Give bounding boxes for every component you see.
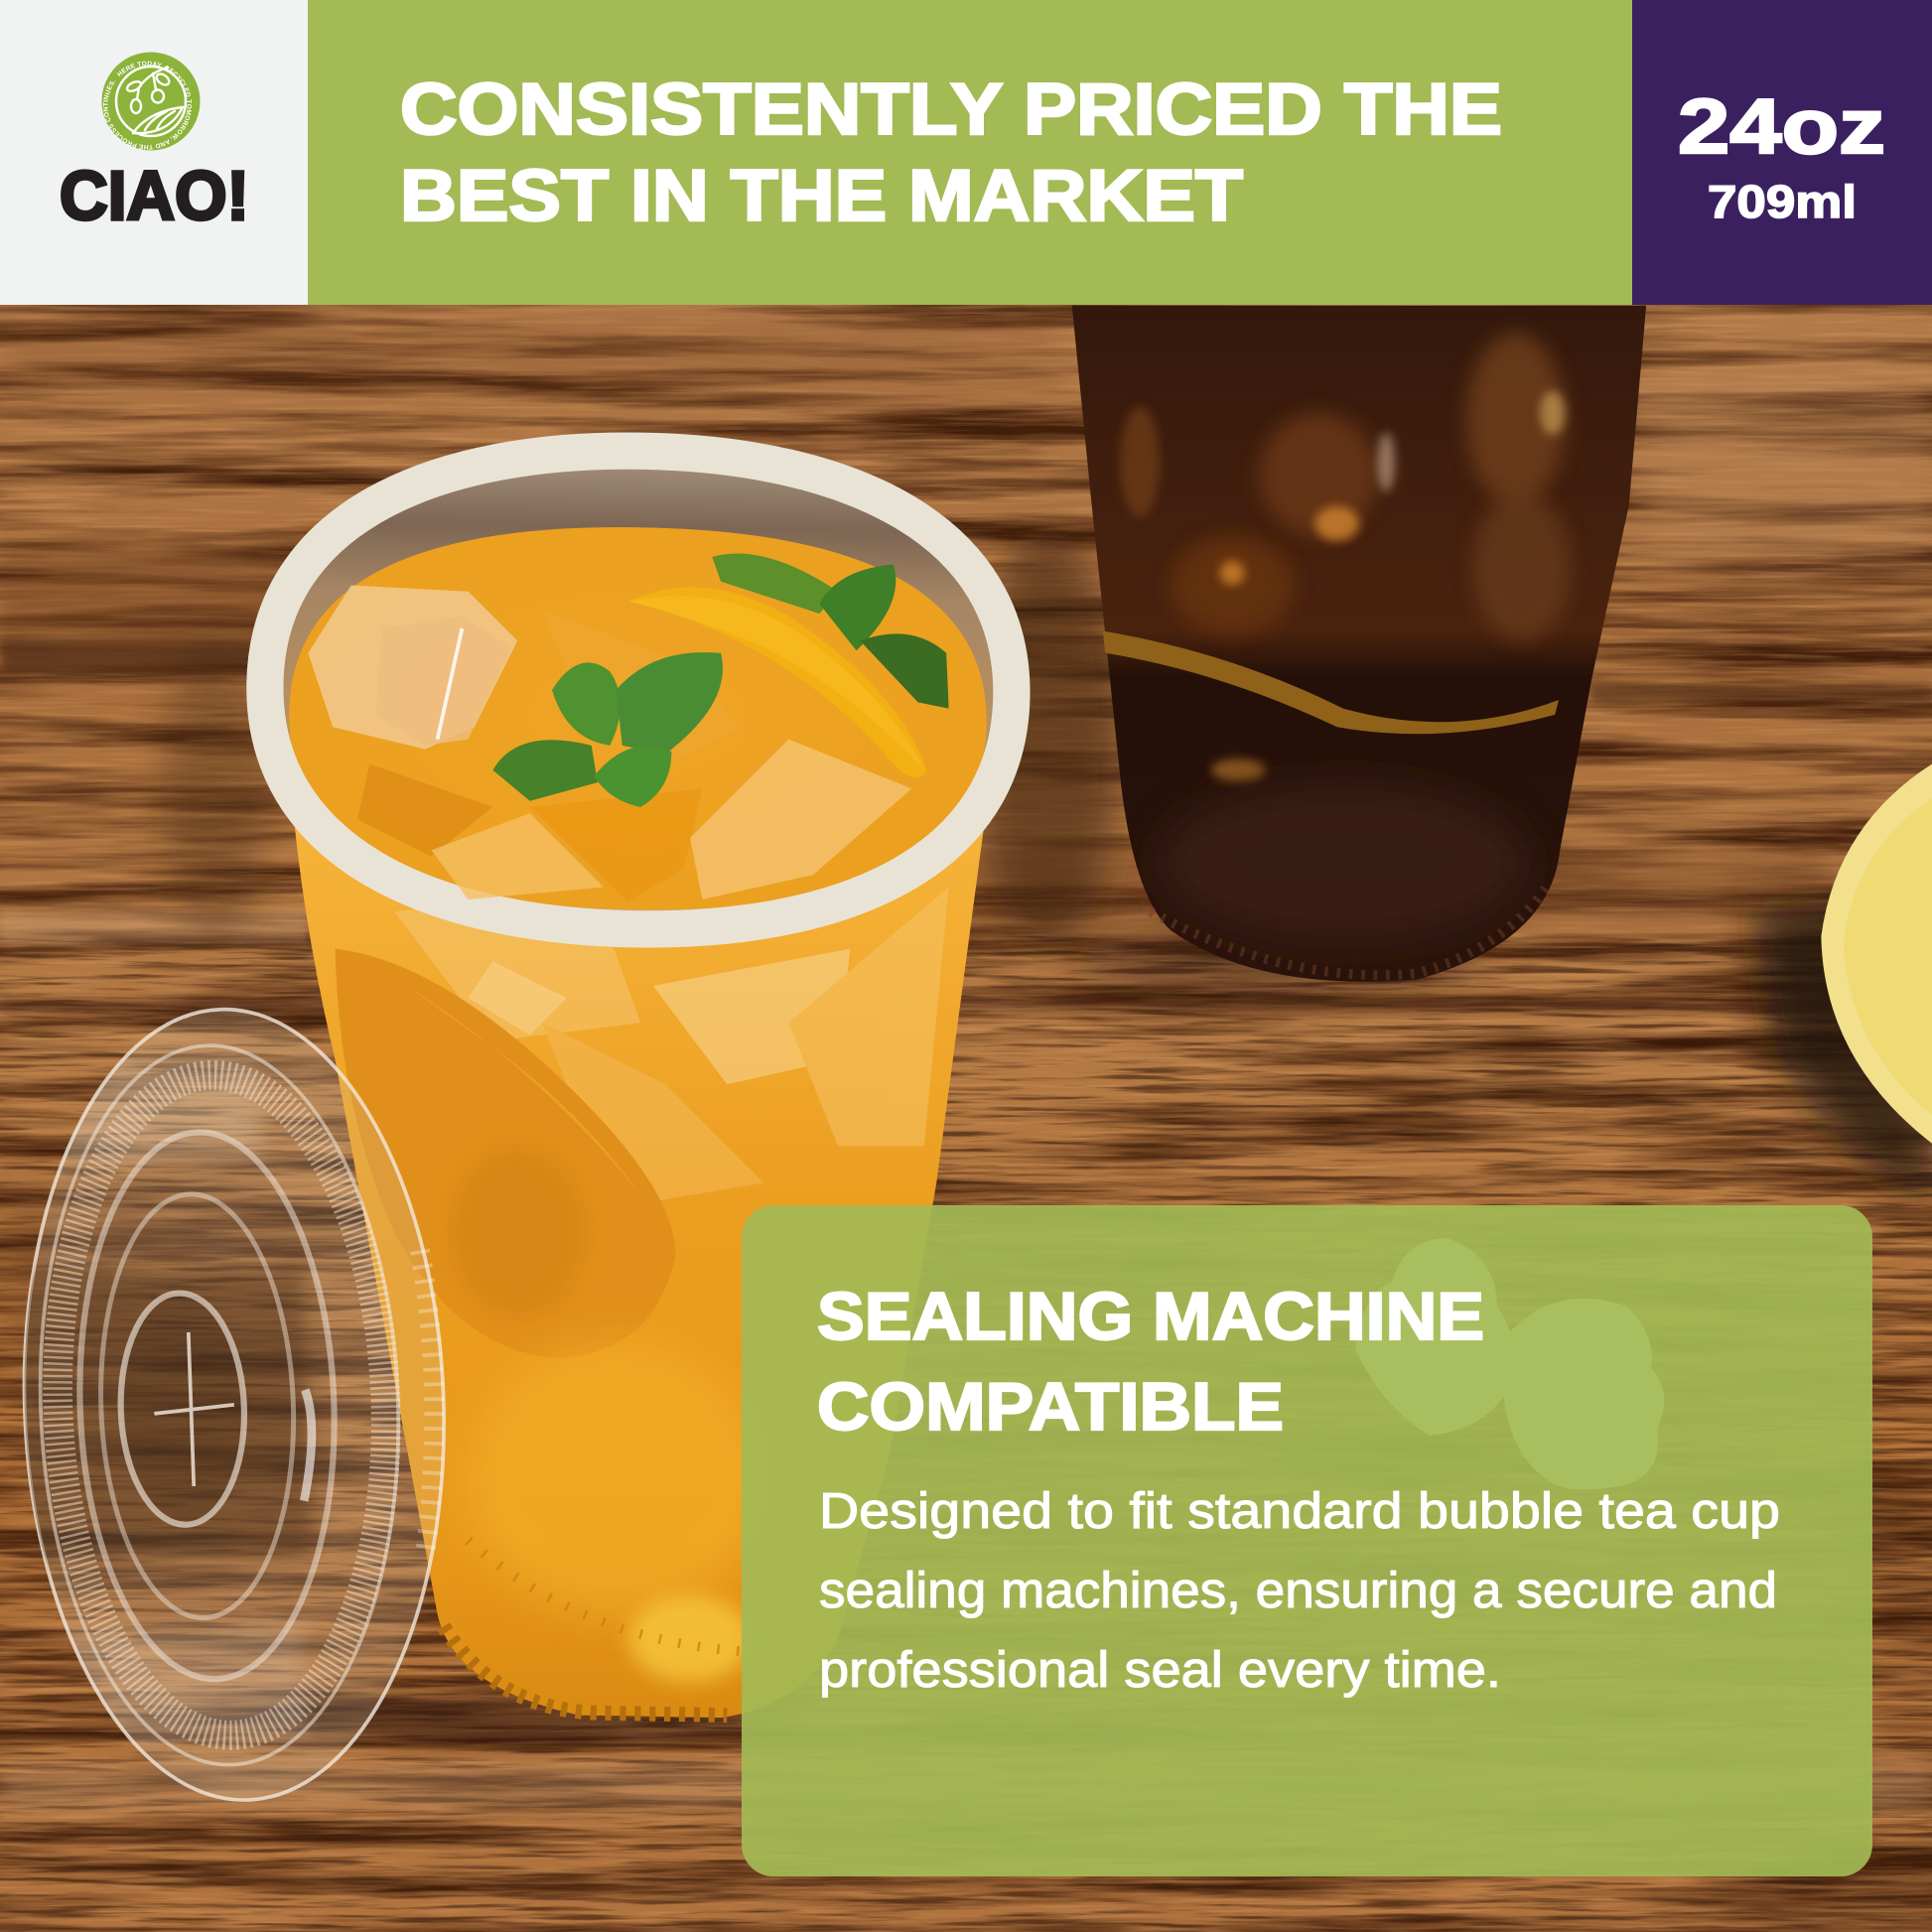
marshmallow-like object behind panel: [1282, 1238, 1664, 1489]
shadows on table: [160, 530, 1932, 1743]
cola cup: [1072, 306, 1646, 982]
mint leaves: [492, 554, 949, 807]
panel body text: professional seal every time.: [819, 1641, 1501, 1698]
icon: circular olive badge: HERE TODAY, RECYCLED TOMORROW, AND THE PROCESS CONTINUES.: [103, 62, 192, 150]
logo wordmark: CIAO!: [60, 157, 249, 234]
header band: [0, 0, 1932, 305]
bubbles and lower drink: [469, 1343, 763, 1614]
ice cubes: [308, 586, 911, 901]
panel: size: 709ml: [1708, 176, 1857, 227]
title: CONSISTENTLY PRICED THE: [400, 69, 1502, 150]
panel: logo: [0, 0, 308, 305]
panel body text: Designed to fit standard bubble tea cup: [819, 1482, 1780, 1539]
panel: sealing machine compatible callout: [742, 1205, 1872, 1876]
panel: headline: [308, 0, 1632, 305]
panel heading: [817, 1279, 1484, 1445]
plastic lid: [0, 1002, 458, 1808]
size label: 24oz: [1678, 82, 1885, 170]
lemon slice on surface: [628, 587, 926, 778]
panel: size: [1632, 0, 1932, 305]
panel body text: [819, 1482, 1780, 1698]
panel heading: SEALING MACHINE: [817, 1279, 1484, 1354]
title: [400, 69, 1502, 236]
title: BEST IN THE MARKET: [400, 156, 1243, 236]
lemon wedge: [1821, 763, 1932, 1144]
ice in cup: [394, 888, 949, 1207]
panel body text: sealing machines, ensuring a secure and: [819, 1562, 1777, 1618]
orange drink cup body: [293, 813, 986, 1718]
orange drink cup rim and surface: [261, 445, 1016, 935]
panel background: [742, 1205, 1872, 1876]
peach slice in cup: [336, 949, 675, 1358]
panel heading: COMPATIBLE: [817, 1369, 1284, 1445]
